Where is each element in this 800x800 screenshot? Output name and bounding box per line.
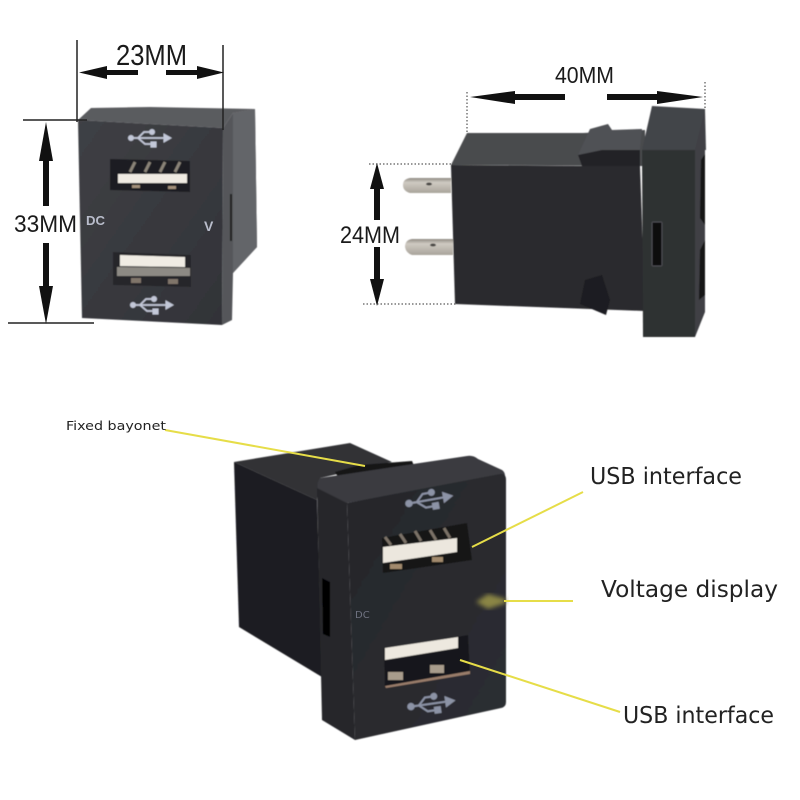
USB icon, upper, bottom view — [404, 486, 454, 514]
bayonet clip, top — [578, 124, 642, 166]
callout: fixed bayonet: Fixed bayonet — [66, 418, 166, 433]
bottom view: product photo — [234, 443, 506, 740]
dimension: 23MM: 23MM — [116, 40, 187, 72]
slot — [652, 222, 662, 266]
front view face — [78, 120, 223, 325]
top of front view flange — [78, 107, 255, 128]
dimension: 24MM — [340, 163, 456, 306]
slot, bottom view — [322, 578, 330, 637]
dimension: 33MM — [8, 120, 94, 324]
flange top — [317, 456, 505, 503]
blade terminal, lower — [405, 239, 453, 255]
USB icon, lower, front view — [130, 296, 173, 314]
voltage display glow — [476, 594, 506, 609]
callout: voltage display: Voltage display — [601, 577, 778, 603]
top of body — [234, 443, 392, 500]
side body top — [451, 130, 645, 166]
dimension: 40MM: 40MM — [555, 62, 614, 88]
side slot — [230, 194, 232, 241]
flange — [642, 106, 706, 150]
upper USB port, bottom view — [382, 523, 472, 573]
dimension: 23MM — [77, 40, 224, 130]
upper USB port, front view — [110, 159, 190, 192]
left side of body — [234, 462, 322, 677]
USB icon, upper, front view — [128, 130, 171, 147]
dimension: 24MM: 24MM — [340, 222, 400, 249]
DC label, front view: DC — [86, 213, 106, 228]
blade terminal, upper — [403, 178, 451, 193]
USB icon, lower, bottom view — [406, 691, 456, 717]
lower USB port, front view — [113, 252, 191, 287]
bayonet clip, bottom — [580, 275, 610, 315]
callout: lower USB interface: USB interface — [623, 703, 774, 729]
callout: upper USB interface — [472, 464, 742, 547]
dimension: 40MM — [467, 62, 705, 134]
side of front view body — [222, 109, 257, 325]
side view: product photo — [403, 106, 706, 337]
callout: lower USB interface — [460, 660, 774, 729]
side body — [451, 165, 645, 311]
callout: upper USB interface: USB interface — [590, 464, 742, 490]
V label, front view: V — [204, 218, 214, 234]
dimension: 33MM: 33MM — [14, 211, 77, 238]
flange face — [347, 474, 506, 740]
lower USB port, bottom view — [384, 635, 470, 688]
front view: product photo — [78, 107, 257, 325]
bayonet clip — [335, 461, 415, 480]
DC label, bottom view: DC — [355, 610, 370, 621]
flange left — [317, 488, 355, 740]
callout: fixed bayonet — [66, 418, 365, 466]
port openings visible on flange edge — [700, 154, 705, 225]
